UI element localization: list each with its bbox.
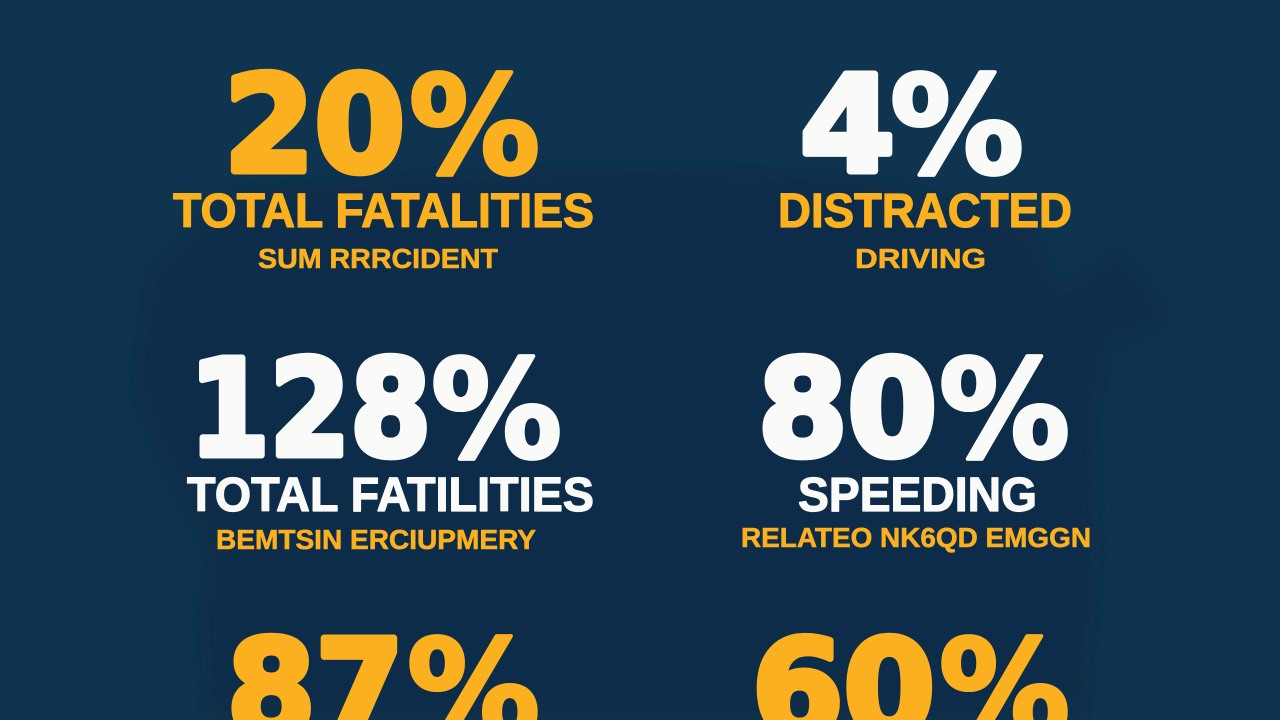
sublabel: SUM RRRCIDENT bbox=[258, 243, 498, 274]
heading distracted: DISTRACTED bbox=[778, 185, 1072, 238]
value 20: 20 bbox=[224, 49, 405, 203]
value 128: 128 bbox=[189, 333, 431, 487]
percent sign: % bbox=[431, 332, 562, 490]
heading total fatalities: TOTAL FATALITIES bbox=[173, 185, 594, 238]
sublabel driving: DRIVING bbox=[855, 243, 986, 274]
stat: 4% distracted driving bbox=[778, 48, 1072, 274]
stat: 87% bbox=[227, 612, 540, 720]
percent sign: % bbox=[939, 332, 1070, 490]
percent sign: % bbox=[890, 48, 1024, 206]
value 80: 80 bbox=[758, 333, 937, 487]
percent sign: % bbox=[409, 48, 540, 206]
value 4: 4 bbox=[800, 49, 895, 203]
stat: 20% total fatalities bbox=[173, 48, 594, 274]
sublabel: RELATEO NK6QD EMGGN bbox=[741, 522, 1091, 553]
stat: 60% bbox=[752, 612, 1070, 720]
heading total fatilities: TOTAL FATILITIES bbox=[187, 469, 594, 522]
stat: 80% speeding bbox=[741, 332, 1091, 553]
sublabel: BEMTSIN ERCIUPMERY bbox=[216, 524, 536, 555]
background silhouette map bbox=[132, 165, 1172, 720]
heading speeding: SPEEDING bbox=[798, 469, 1037, 522]
stat: 128% total fatilities bbox=[187, 332, 594, 555]
